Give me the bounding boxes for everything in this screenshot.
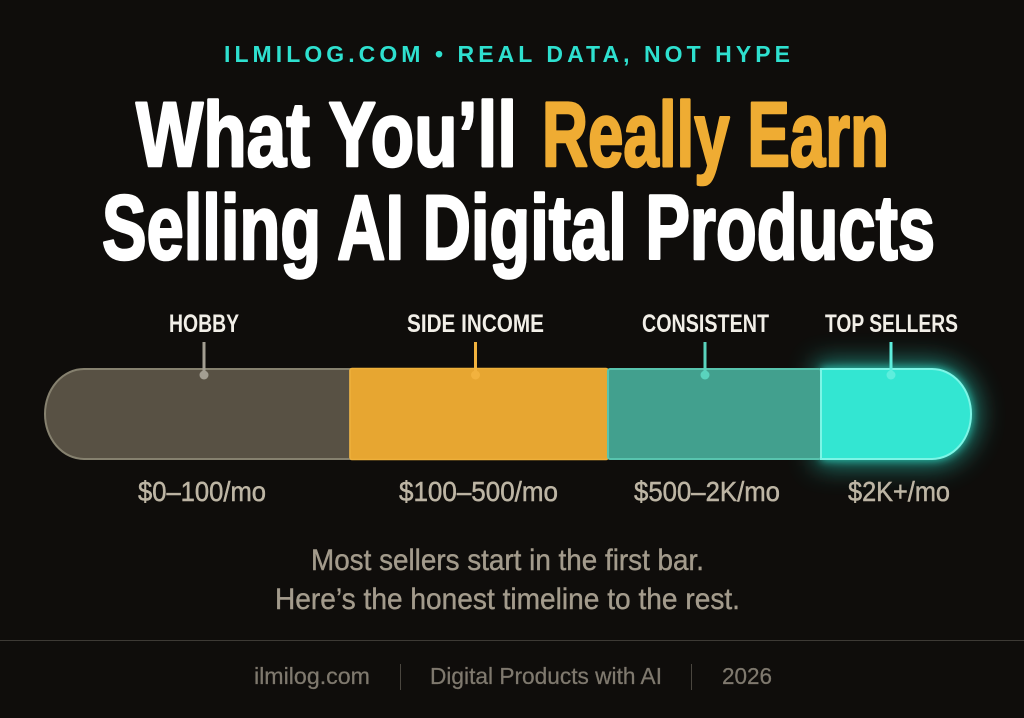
marker: top sellers [886,342,896,380]
marker: side income [471,342,480,380]
segment: hobby [45,369,350,459]
tagline: ILMILOG.COM • REAL DATA, NOT HYPE [224,41,790,67]
tier labels [169,310,958,338]
income values [138,476,950,507]
segment: consistent [608,369,821,459]
footer text [254,663,772,689]
marker: consistent [700,342,710,380]
footer text: Digital Products with AI [430,663,662,689]
income values: $500–2K/mo [634,476,780,507]
marker: hobby [200,342,208,380]
footer text: 2026 [722,663,772,689]
glow: top sellers [815,362,978,466]
income values: $2K+/mo [848,476,950,507]
tier labels: CONSISTENT [642,310,769,338]
body text: Most sellers start in the first bar. [311,544,704,577]
income bar chart [45,342,978,466]
income values: $100–500/mo [399,476,558,507]
title [102,84,935,279]
body text [275,544,740,616]
title: What You’ll [136,84,517,186]
tier labels: HOBBY [169,310,239,338]
footer text: ilmilog.com [254,663,370,689]
tier labels: SIDE INCOME [407,310,544,338]
glow: top sellers inner [821,367,973,461]
income values: $0–100/mo [138,476,266,507]
tier labels: TOP SELLERS [825,310,958,338]
footer [0,640,1024,690]
segment: side income [350,368,608,460]
body text: Here’s the honest timeline to the rest. [275,583,740,616]
segment: top sellers [821,369,971,459]
